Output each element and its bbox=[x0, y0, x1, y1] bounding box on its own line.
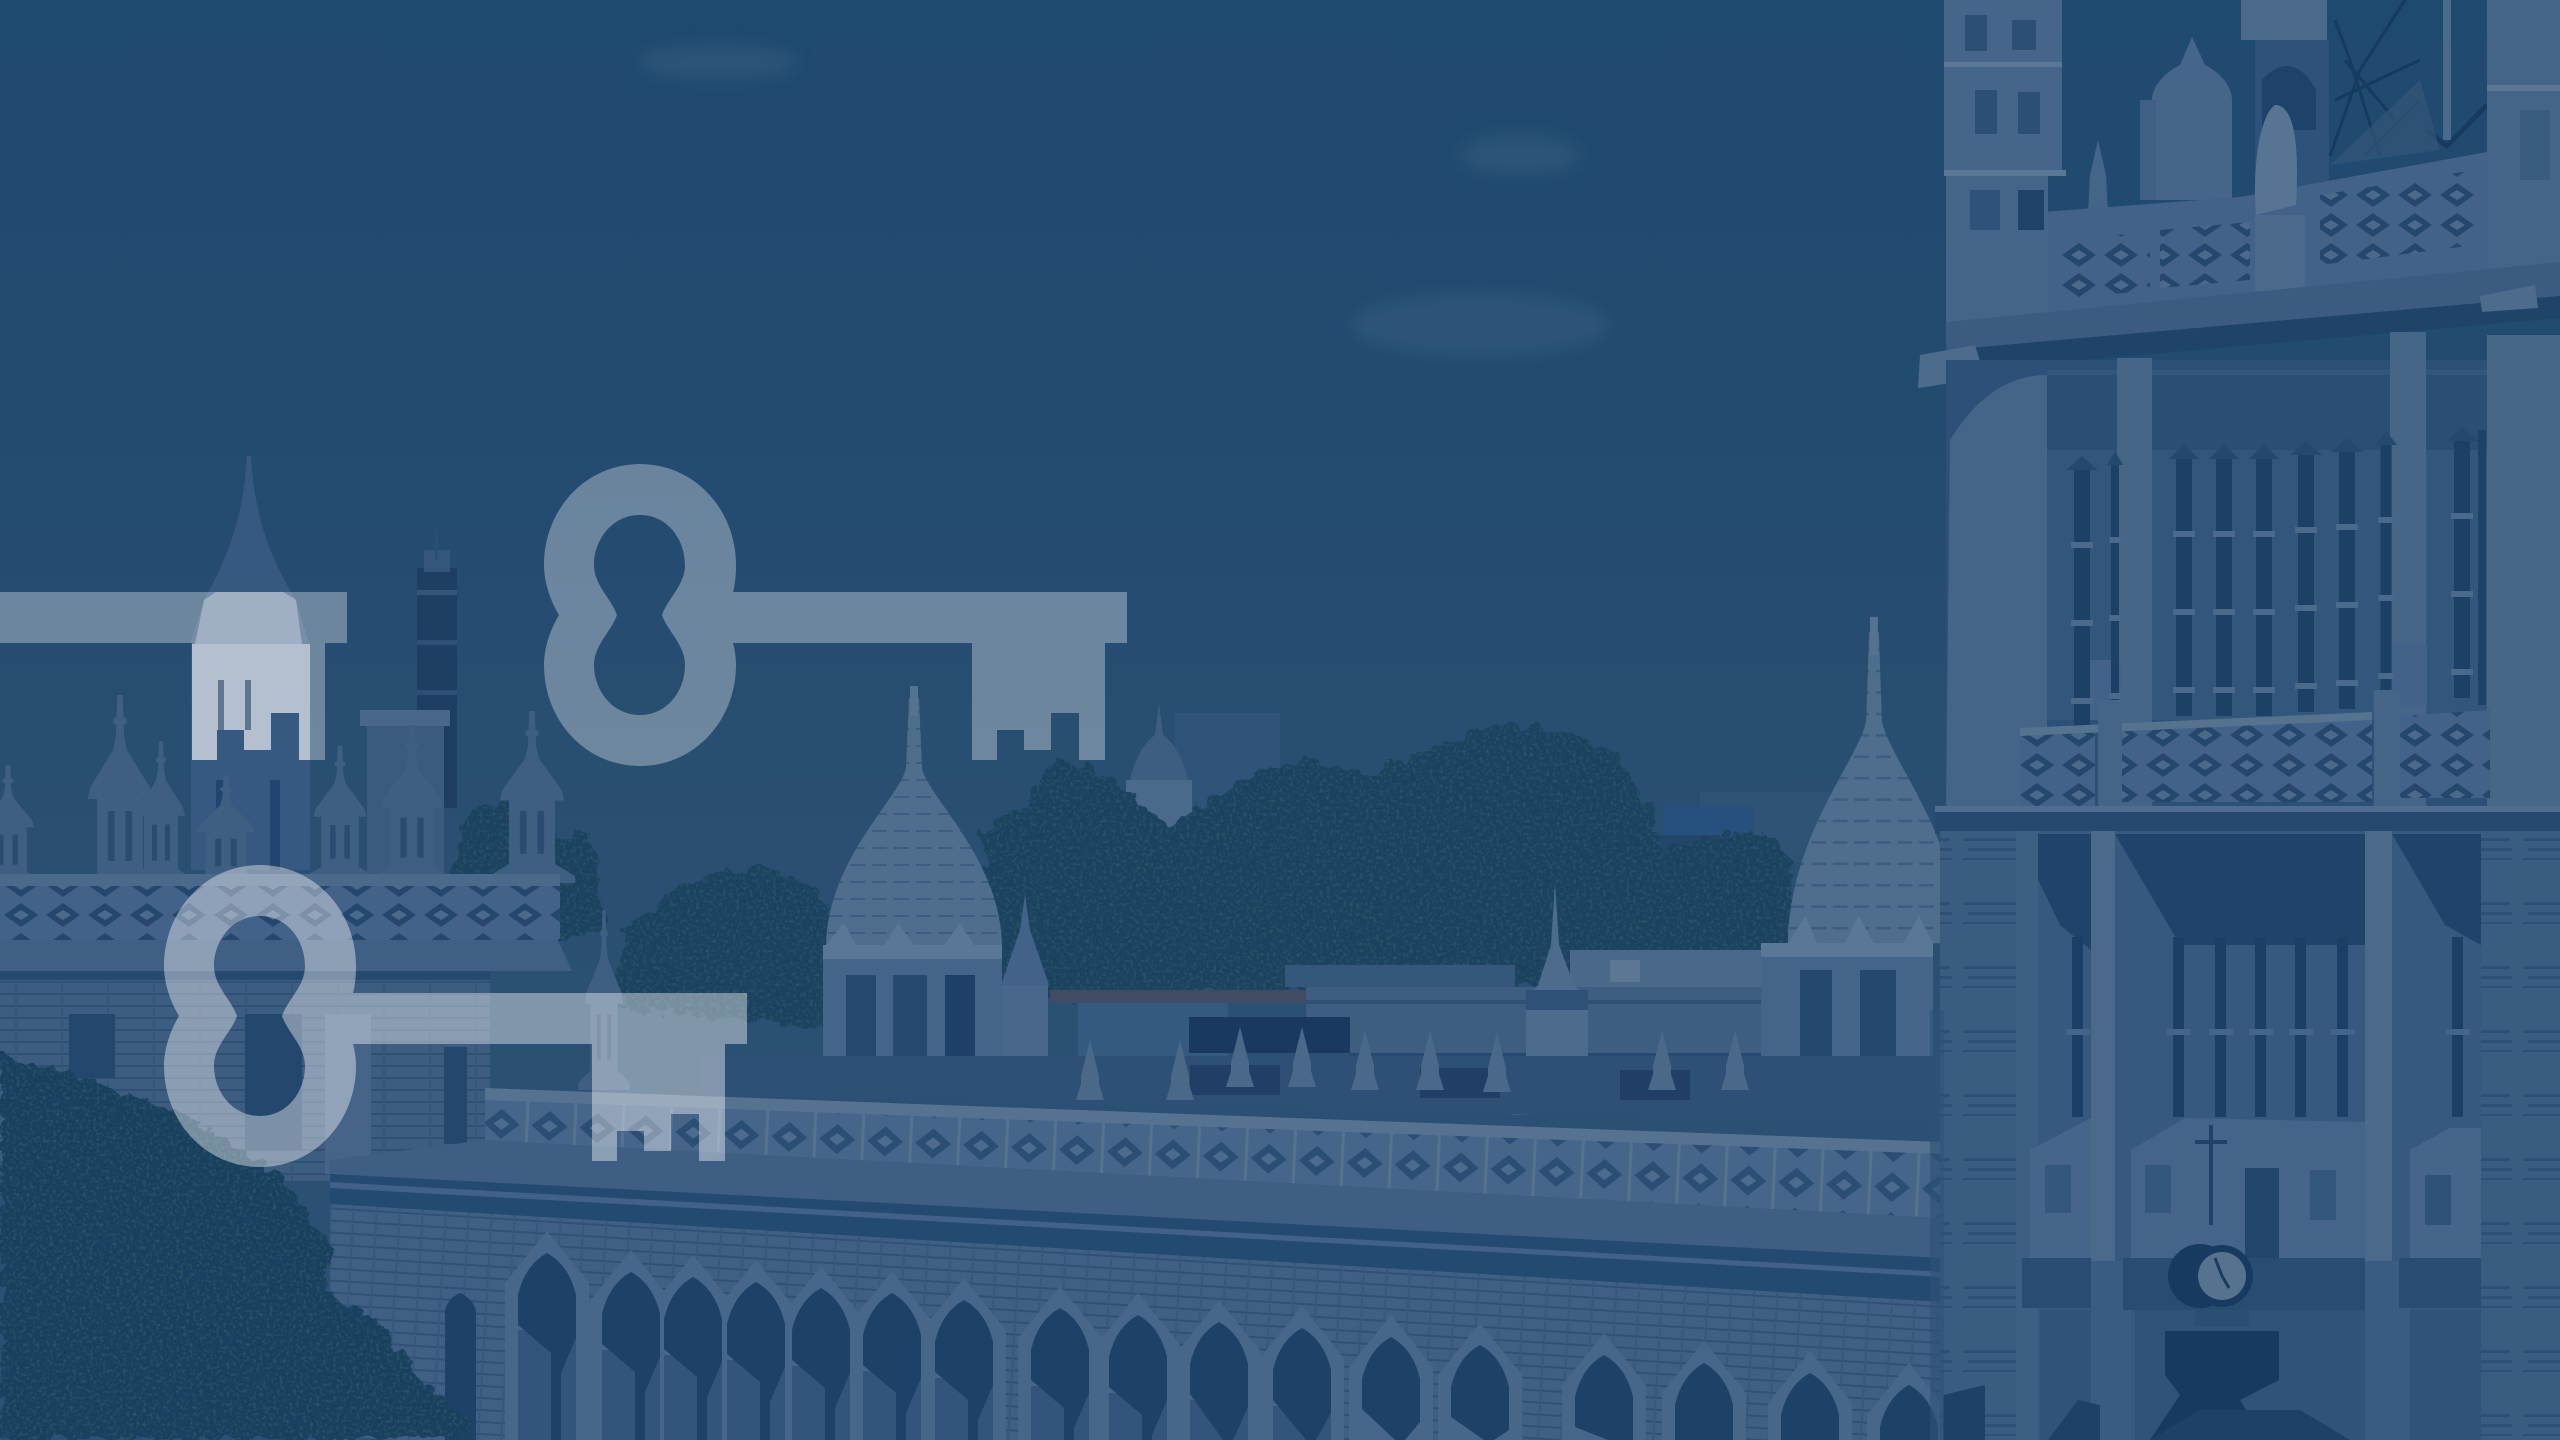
shadowed doorways at the bottom of the tower bbox=[1943, 1385, 2350, 1440]
right Gothic tower bbox=[1918, 0, 2560, 1440]
upper corner turrets and parapet bbox=[1918, 0, 2560, 388]
clouds bbox=[638, 45, 1610, 357]
low flat-roofed buildings in the middle distance bbox=[1050, 950, 1770, 1093]
distant skyline: BT tower, high-rise and small dome bbox=[417, 530, 1830, 920]
foreground tree at lower left bbox=[0, 1052, 470, 1440]
long wall: balustrade, cornice and masonry bbox=[330, 1088, 1943, 1440]
lower storey with piers, shadow and windows bbox=[1940, 831, 2560, 1440]
left Gothic block with turrets and central tower bbox=[0, 456, 575, 1181]
upper wall with piers and lancet windows bbox=[1946, 332, 2560, 810]
key: left, partly cut off by the page edge bbox=[0, 592, 347, 760]
onion dome pavilions bbox=[578, 617, 1960, 1115]
row of pointed arch windows bbox=[445, 1231, 1945, 1440]
rooftop pinnacles row bbox=[700, 1027, 1950, 1125]
key: centre, over open sky bbox=[544, 464, 1127, 766]
key: lower left, over the building bbox=[160, 860, 760, 1170]
background trees bbox=[440, 727, 1790, 1030]
balcony with tracery panels bbox=[1935, 690, 2560, 834]
clock with spire and base bbox=[2150, 1125, 2279, 1440]
